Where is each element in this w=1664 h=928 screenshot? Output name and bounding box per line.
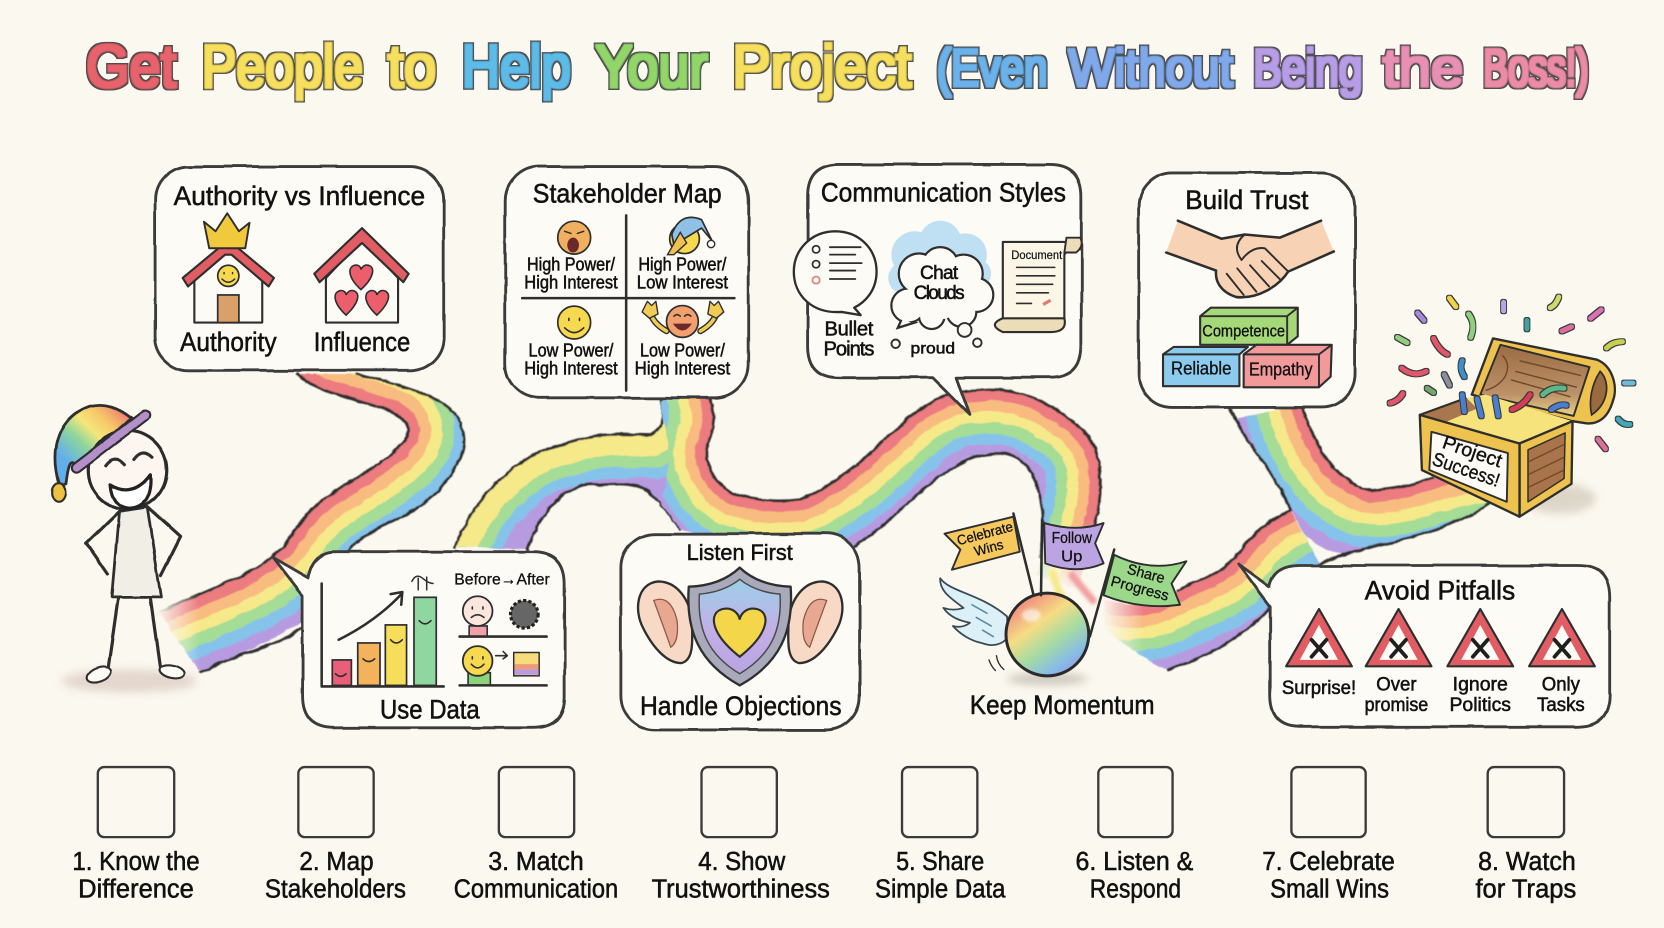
subtitle: Being — [1253, 39, 1362, 98]
rainbow section: Build Trust to chest — [1227, 403, 1490, 563]
label: Bullet Points: Bullet — [825, 318, 874, 340]
label: High Power / Low Interest: Low Interest — [637, 273, 728, 293]
quadrant axes — [522, 215, 734, 390]
flag: Celebrate Wins: Celebrate — [955, 519, 1015, 548]
step 3 — [454, 767, 618, 904]
label: Low Power / High Interest: High Interest — [524, 359, 618, 379]
step 8 — [1475, 767, 1576, 904]
label: Project Success! — [1429, 431, 1509, 492]
panel: Keep Momentum — [940, 514, 1186, 720]
subtitle: (Even — [937, 39, 1047, 98]
ground shadow — [62, 669, 198, 693]
step 8: 8. Watch — [1478, 848, 1576, 876]
label: Project Success!: Success! — [1429, 449, 1502, 492]
icon: sleepy face with nightcap — [668, 217, 715, 255]
step 6 — [1075, 767, 1193, 904]
icon: blue cloud behind — [888, 221, 991, 294]
label: Keep Momentum: Keep Momentum — [970, 690, 1155, 720]
step 4 — [652, 767, 830, 904]
chest opening glow — [1420, 395, 1573, 443]
label: High Power / High Interest — [524, 255, 618, 293]
flag: Share Progress: Share — [1125, 562, 1166, 587]
icon: wing — [940, 578, 1008, 671]
label: Low Power / High Interest: Low Power/ — [529, 340, 613, 360]
panel frame with tail — [808, 164, 1081, 415]
icon: warning sign 2 — [1366, 609, 1431, 666]
step 2 — [265, 767, 406, 904]
panel: Build Trust — [1139, 173, 1355, 407]
icon: left ear — [638, 581, 692, 663]
flag: Celebrate Wins: Wins — [972, 537, 1005, 559]
title: Project — [732, 32, 912, 100]
panel heading: Build Trust — [1185, 185, 1309, 215]
icon: sad face with tangle — [460, 596, 547, 637]
panel: Stakeholder Map — [505, 167, 748, 398]
label: Low Power / High Interest — [524, 340, 618, 379]
rainbow path — [157, 373, 1490, 684]
label: Over promise — [1365, 675, 1428, 716]
label: Influence: Influence — [314, 327, 410, 357]
label: Low Power / High Interest, right — [635, 340, 730, 379]
panel frame — [505, 167, 748, 398]
step 5: 5. Share — [896, 848, 984, 876]
legs and feet — [85, 598, 186, 686]
icon: warning sign 3 — [1447, 609, 1513, 666]
icon: bullet points speech bubble — [794, 231, 877, 315]
step 5 — [875, 767, 1006, 904]
subtitle: the — [1383, 39, 1463, 98]
step 6: Respond — [1090, 876, 1181, 904]
label: Bullet Points: Points — [824, 338, 874, 360]
icon: right ear — [788, 581, 842, 663]
stick figure with rainbow hat — [52, 405, 198, 693]
flag: Follow Up: Follow — [1052, 530, 1092, 547]
step 7: 7. Celebrate — [1262, 848, 1395, 876]
subtitle — [937, 39, 1588, 98]
label: High Power / Low Interest: High Power/ — [638, 255, 726, 275]
rainbow fade near the ball — [1101, 589, 1144, 674]
icon: Empathy block — [1244, 345, 1332, 387]
panel frame — [621, 534, 860, 730]
label: Before to After: Before→After — [454, 572, 550, 589]
rainbow fade near the figure — [157, 594, 200, 684]
chest right side — [1520, 421, 1573, 517]
label: Bullet Points — [824, 318, 874, 360]
label: Low Power / High Interest, right: High Interest — [635, 359, 730, 379]
subtitle: Without — [1069, 39, 1233, 98]
panel frame with tail — [273, 552, 565, 728]
bar chart with rising arrow — [322, 576, 444, 686]
panel frame with tail — [1238, 564, 1610, 727]
title: Help — [462, 32, 571, 100]
torso and arms — [86, 507, 181, 597]
label: Listen First: Listen First — [687, 540, 794, 565]
subtitle: Boss!) — [1483, 39, 1588, 98]
label: Only Tasks: Tasks — [1537, 695, 1585, 716]
label: Over promise: promise — [1365, 695, 1428, 716]
icon: Competence block — [1200, 308, 1298, 345]
panel: Communication Styles — [794, 164, 1082, 415]
step 5: Simple Data — [875, 876, 1006, 904]
label: Over promise: Over — [1376, 675, 1417, 696]
label: Chat Clouds: Clouds — [914, 283, 965, 304]
title: People — [202, 32, 363, 100]
label: Only Tasks — [1537, 675, 1585, 716]
flag: Follow Up — [1041, 520, 1104, 595]
icon: smiling face — [558, 306, 591, 339]
panel frame — [155, 167, 444, 370]
panel heading: Avoid Pitfalls — [1365, 575, 1515, 605]
label: Chat Clouds: Chat — [920, 263, 959, 284]
ball shadow — [1007, 673, 1088, 685]
label: Empathy: Empathy — [1249, 360, 1313, 380]
icon: influence house with hearts — [314, 228, 409, 323]
label: High Power / High Interest: High Interest — [524, 273, 618, 293]
rainbow fade under the flags — [1024, 520, 1098, 591]
label: Handle Objections: Handle Objections — [640, 691, 842, 721]
step 8: for Traps — [1475, 876, 1576, 904]
step 4: 4. Show — [698, 848, 786, 876]
rainbow section: arch to Stakeholder Map — [455, 398, 680, 550]
chest shadow — [1524, 484, 1596, 514]
title: to — [387, 32, 436, 100]
hat brim — [77, 416, 144, 468]
label: Use Data: Use Data — [380, 694, 480, 724]
icon: yawning face — [558, 221, 591, 254]
icon: happy face with tidy chart — [460, 646, 547, 685]
icon: Reliable block — [1163, 347, 1248, 386]
step 7 — [1262, 767, 1395, 904]
rainbow streaks behind the ball — [1053, 573, 1093, 601]
panel: Use Data — [273, 552, 565, 728]
rainbow section: Keep Momentum to junction — [1104, 510, 1321, 669]
panel frame — [1139, 173, 1355, 407]
flag: Follow Up: Up — [1061, 548, 1083, 565]
step 4: Trustworthiness — [652, 876, 830, 904]
jester hat — [52, 405, 132, 502]
step 7: Small Wins — [1270, 876, 1389, 904]
confetti — [1390, 297, 1633, 449]
step 6: 6. Listen & — [1075, 848, 1193, 876]
label: Ignore Politics: Politics — [1449, 695, 1511, 716]
title: Get — [86, 32, 177, 100]
rainbow section: wave to Keep Momentum — [706, 390, 1100, 589]
step 3: 3. Match — [488, 848, 584, 876]
panel heading: Authority vs Influence — [174, 181, 425, 211]
label: High Power / High Interest: High Power/ — [527, 255, 615, 275]
step 1: Difference — [78, 876, 194, 904]
icon: shield with heart — [688, 568, 791, 685]
icon: chat cloud — [891, 247, 993, 329]
icon: handshake — [1166, 221, 1334, 297]
flag: Share Progress — [1090, 550, 1186, 637]
label: Only Tasks: Only — [1542, 675, 1580, 696]
chest lid — [1472, 338, 1615, 423]
label: Ignore Politics — [1449, 675, 1511, 716]
icon: rainbow ball — [1006, 593, 1089, 676]
icon: warning sign 4 — [1529, 609, 1595, 666]
title: Your — [595, 32, 708, 100]
label: Authority: Authority — [180, 327, 277, 357]
step 3: Communication — [454, 876, 618, 904]
panel: Authority vs Influence — [155, 167, 444, 370]
label: High Power / Low Interest — [637, 255, 728, 293]
panel: Avoid Pitfalls — [1238, 564, 1610, 727]
label: Project Success!: Project — [1440, 432, 1505, 473]
icon: excited face with raised hands — [642, 301, 724, 337]
label: Chat Clouds — [914, 263, 965, 304]
step 1: 1. Know the — [72, 848, 200, 876]
flag: Share Progress: Progress — [1109, 574, 1170, 605]
chest front face — [1420, 415, 1520, 517]
label: Ignore Politics: Ignore — [1453, 675, 1508, 696]
icon: document scroll — [995, 238, 1082, 332]
flag: Celebrate Wins — [944, 514, 1034, 595]
panel heading: Stakeholder Map — [533, 179, 722, 209]
plaque — [1429, 432, 1508, 502]
checklist — [72, 767, 1576, 904]
panel: Handle Objections — [621, 534, 860, 730]
panel heading: Communication Styles — [821, 178, 1066, 208]
step 1 — [72, 767, 200, 904]
step 2: Stakeholders — [265, 876, 406, 904]
label: garbled caption: proud — [911, 340, 955, 357]
head with smile — [88, 431, 167, 509]
label: Surprise!: Surprise! — [1282, 678, 1356, 699]
icon: treasure chest with confetti — [1390, 297, 1633, 517]
title — [86, 32, 912, 100]
icon: warning sign 1 — [1286, 609, 1352, 666]
icon: authority house with crown — [183, 213, 274, 323]
label: Document: Document — [1011, 249, 1063, 262]
rainbow section: from the figure up to Authority — [159, 373, 464, 673]
label: Low Power / High Interest, right: Low Power/ — [640, 340, 725, 360]
label: Reliable: Reliable — [1171, 359, 1231, 379]
label: Competence: Competence — [1202, 322, 1285, 340]
thought dots — [891, 323, 982, 348]
step 2: 2. Map — [299, 848, 374, 876]
